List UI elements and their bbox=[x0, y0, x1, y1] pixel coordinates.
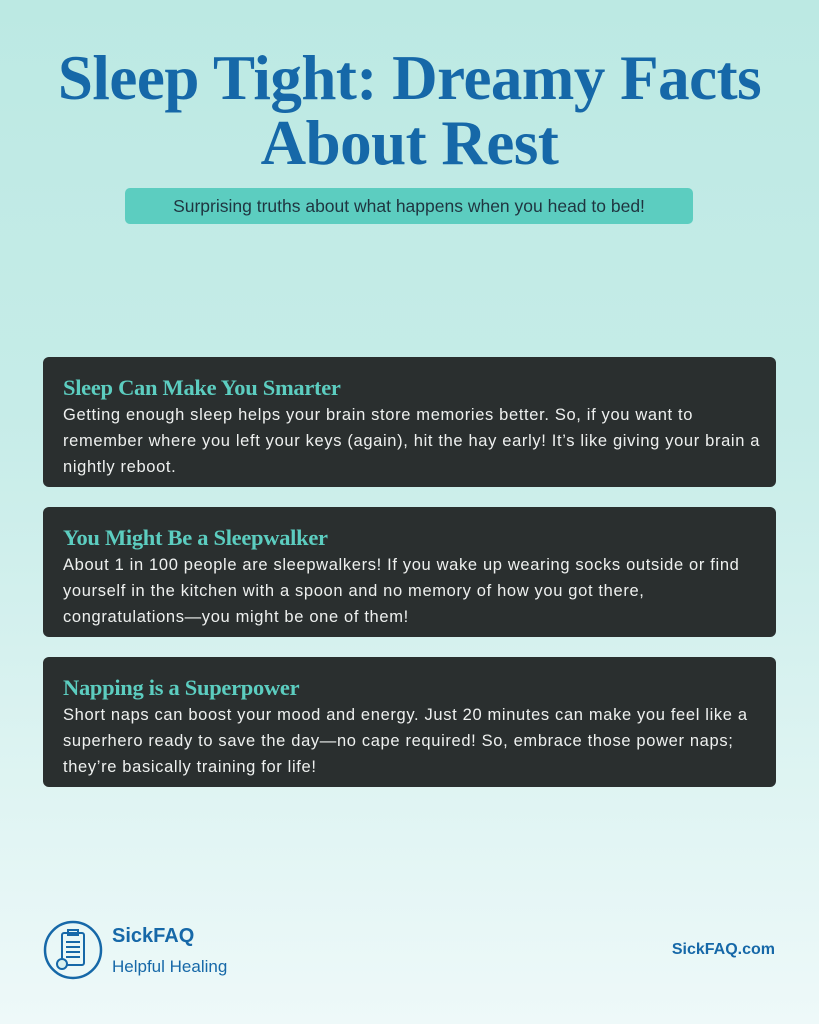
body: yourself in the kitchen with a spoon and no memory of how you got there, bbox=[63, 582, 645, 600]
body: they’re basically training for life! bbox=[63, 758, 317, 776]
card: sleep smarter bbox=[43, 357, 776, 487]
title bbox=[58, 43, 761, 178]
body: Short naps can boost your mood and energy. Just 20 minutes can make you feel like a bbox=[63, 706, 748, 724]
body bbox=[63, 556, 739, 626]
subtitle pill: Surprising truths about what happens when you head to bed! bbox=[173, 196, 645, 216]
body: superhero ready to save the day—no cape required! So, embrace those power naps; bbox=[63, 732, 733, 750]
body: nightly reboot. bbox=[63, 458, 176, 476]
body: remember where you left your keys (again), hit the hay early! It’s like giving your brain a bbox=[63, 432, 760, 450]
icon: logo clipboard bbox=[44, 920, 102, 980]
heading: Sleep Can Make You Smarter bbox=[63, 375, 341, 400]
subtitle pill bbox=[125, 188, 693, 224]
card: sleepwalker bbox=[43, 507, 776, 637]
body bbox=[63, 406, 760, 476]
card: napping bbox=[43, 657, 776, 787]
heading: Napping is a Superpower bbox=[63, 675, 299, 700]
body: congratulations—you might be one of them! bbox=[63, 608, 409, 626]
brand name: SickFAQ bbox=[112, 925, 194, 947]
title: Sleep Tight: Dreamy Facts bbox=[58, 43, 761, 113]
heading: You Might Be a Sleepwalker bbox=[63, 525, 328, 550]
body bbox=[63, 706, 748, 776]
website url: SickFAQ.com bbox=[672, 941, 775, 958]
body: About 1 in 100 people are sleepwalkers! If you wake up wearing socks outside or find bbox=[63, 556, 739, 574]
tagline: Helpful Healing bbox=[112, 957, 227, 976]
title: About Rest bbox=[261, 108, 558, 178]
body: Getting enough sleep helps your brain store memories better. So, if you want to bbox=[63, 406, 693, 424]
